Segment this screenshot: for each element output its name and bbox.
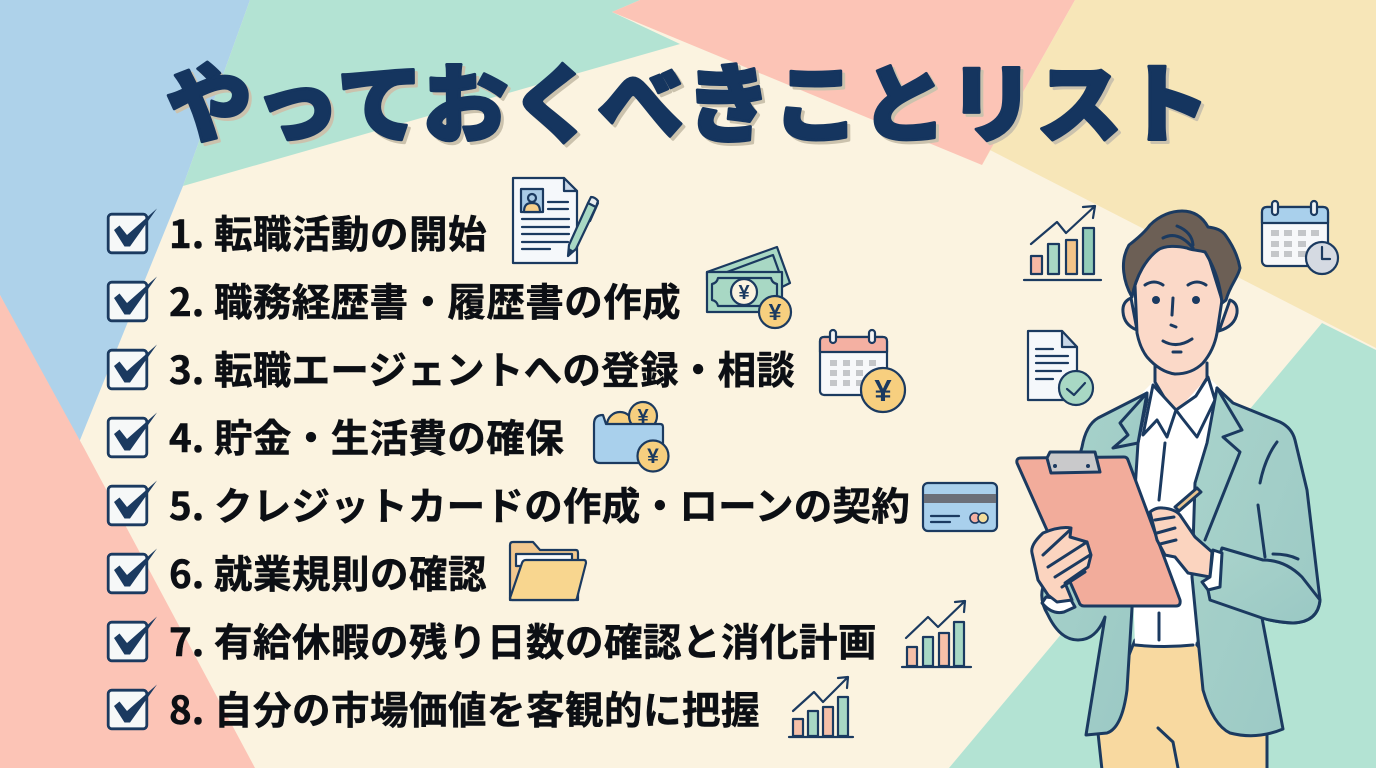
checklist item 6: 就業規則の確認 — [214, 544, 487, 600]
icon: document with check — [1028, 331, 1093, 405]
checklist item 2: 職務経歴書・履歴書の作成 — [214, 272, 681, 328]
checklist item 5: 5. — [169, 476, 204, 532]
checklist item 1: 1. — [169, 204, 204, 260]
checklist item 4: 貯金・生活費の確保 — [214, 408, 564, 464]
icon: folder — [510, 542, 586, 600]
icon: wallet with coins: ¥ — [647, 445, 659, 468]
left hand — [1042, 597, 1075, 613]
trousers — [1098, 640, 1267, 768]
face features — [1152, 296, 1160, 304]
checklist item 3: 転職エージェントへの登録・相談 — [214, 340, 795, 396]
right hand — [1150, 508, 1212, 577]
icon: calendar with yen coin — [820, 330, 905, 412]
icon: calendar with clock — [1262, 201, 1338, 274]
pencil — [1175, 488, 1201, 511]
icon: banknotes and coin: ¥ — [738, 282, 750, 304]
icon: growth chart row 7 — [902, 601, 971, 667]
checklist item 7: 有給休暇の残り日数の確認と消化計画 — [214, 612, 877, 668]
checklist item 1: 転職活動の開始 — [214, 204, 487, 260]
neck — [1155, 358, 1207, 412]
checklist item 8: 自分の市場価値を客観的に把握 — [214, 680, 760, 736]
right cuff — [1202, 550, 1222, 590]
icon: resume and pen — [513, 178, 598, 263]
icon: banknotes and coin: ¥ — [769, 299, 782, 325]
jacket right side — [1192, 388, 1320, 736]
checklist item 6: 6. — [169, 544, 204, 600]
icon: wallet with coins — [594, 402, 668, 472]
icon: calendar with yen coin: ¥ — [874, 373, 892, 408]
checklist item 3: 3. — [169, 340, 204, 396]
icon: wallet with coins: ¥ — [637, 406, 649, 428]
jacket left side — [1042, 393, 1147, 735]
icon: growth chart top right — [1024, 206, 1101, 280]
checklist item 5: クレジットカードの作成・ローンの契約 — [214, 476, 910, 532]
clipboard — [1017, 457, 1180, 606]
shirt collar — [1143, 385, 1176, 437]
icon: growth chart row 8 — [789, 677, 853, 737]
shirt — [1130, 376, 1240, 646]
icon: banknotes and coin — [707, 247, 791, 328]
checklist item 2: 2. — [169, 272, 204, 328]
hair — [1123, 211, 1240, 303]
illustration: man with clipboard — [1017, 211, 1320, 768]
icon: credit card — [923, 483, 997, 531]
title: やっておくべきことリスト — [166, 35, 1210, 160]
checklist item 7: 7. — [169, 612, 204, 668]
checklist item 4: 4. — [169, 408, 204, 464]
checklist item 8: 8. — [169, 680, 204, 736]
head — [1123, 298, 1137, 330]
